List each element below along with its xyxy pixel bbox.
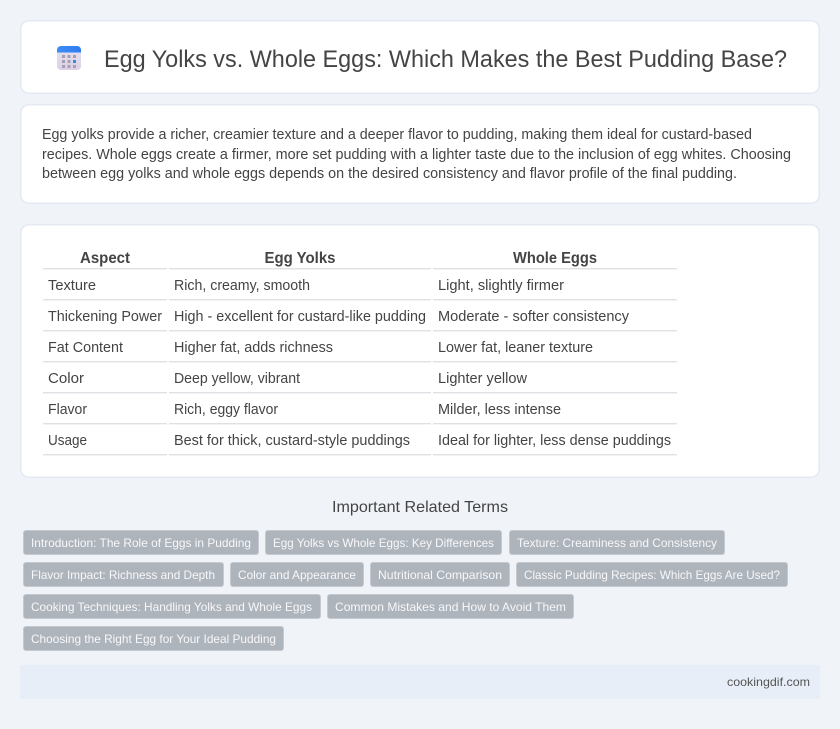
table row: color: Lighter yellow [438,371,528,387]
tag [516,562,788,586]
text block: introduction paragraph: Egg yolks provide a richer, creamier texture and a deeper flavor to pudding, making them ideal for custard-based [42,127,752,143]
tag [510,530,724,554]
table row: usage: Best for thick, custard-style puddings [174,433,410,449]
table row: thickening power [48,309,630,325]
table row: texture: Rich, creamy, smooth [174,278,310,294]
table row: usage: Ideal for lighter, less dense puddings [438,433,671,449]
table row: thickening power: High - excellent for custard-like pudding [174,309,426,325]
table row: texture [48,278,564,294]
tag [370,562,510,586]
table row: fat content: Higher fat, adds richness [174,340,333,356]
tag: Cooking Techniques: Handling Yolks and Whole Eggs [31,600,312,614]
table row: fat content: Fat Content [48,340,123,356]
icon: calendar [57,46,81,70]
table row: flavor [48,402,561,418]
panel: comparison table [21,225,819,477]
table row: texture: Light, slightly firmer [438,278,564,294]
text block: introduction paragraph: recipes. Whole eggs create a firmer, more set pudding with a lighter taste due to the inclusion of egg whites. Choosing [42,147,791,163]
table row: thickening power: Moderate - softer consistency [438,309,630,325]
table row: usage: Usage [48,433,87,449]
tag: Egg Yolks vs Whole Eggs: Key Differences [273,536,494,550]
table row: color: Color [48,371,84,387]
tag: Texture: Creaminess and Consistency [517,536,717,550]
tag [24,594,320,618]
table row: color [48,371,528,387]
tag: Classic Pudding Recipes: Which Eggs Are Used? [524,568,780,582]
tag: Nutritional Comparison [378,568,502,582]
tag [230,562,364,586]
tag: Choosing the Right Egg for Your Ideal Pudding [31,632,276,646]
table row: flavor: Rich, eggy flavor [174,402,278,418]
tag [24,530,258,554]
table row: fat content [48,340,593,356]
table row: color: Deep yellow, vibrant [174,371,300,387]
table row: thickening power: Thickening Power [48,309,162,325]
table header: Egg Yolks [264,250,336,267]
table header: Aspect [80,250,131,267]
panel: title header [21,21,819,93]
tag [266,530,502,554]
table header [80,250,597,267]
footer [20,665,820,699]
title: Egg Yolks vs. Whole Eggs: Which Makes the Best Pudding Base? [104,46,787,73]
tag: Color and Appearance [238,568,356,582]
panel: introduction [21,105,819,203]
table row: flavor: Flavor [48,402,87,418]
table row: texture: Texture [48,278,96,294]
table header: Whole Eggs [513,250,597,267]
related term tags [24,530,788,650]
tag [328,594,574,618]
tag: Introduction: The Role of Eggs in Pudding [31,536,251,550]
text block: introduction paragraph [42,127,791,182]
tag [24,626,284,650]
tag [24,562,224,586]
table row: flavor: Milder, less intense [438,402,561,418]
table row: usage [48,433,671,449]
footer source text: cookingdif.com [727,675,810,689]
tag: Common Mistakes and How to Avoid Them [335,600,566,614]
tag: Flavor Impact: Richness and Depth [31,568,215,582]
text block: introduction paragraph: between egg yolks and whole eggs depends on the desired consistency and flavor profile of the final pudding. [42,166,737,182]
table row: fat content: Lower fat, leaner texture [438,340,593,356]
heading: important related terms: Important Related Terms [332,499,508,516]
